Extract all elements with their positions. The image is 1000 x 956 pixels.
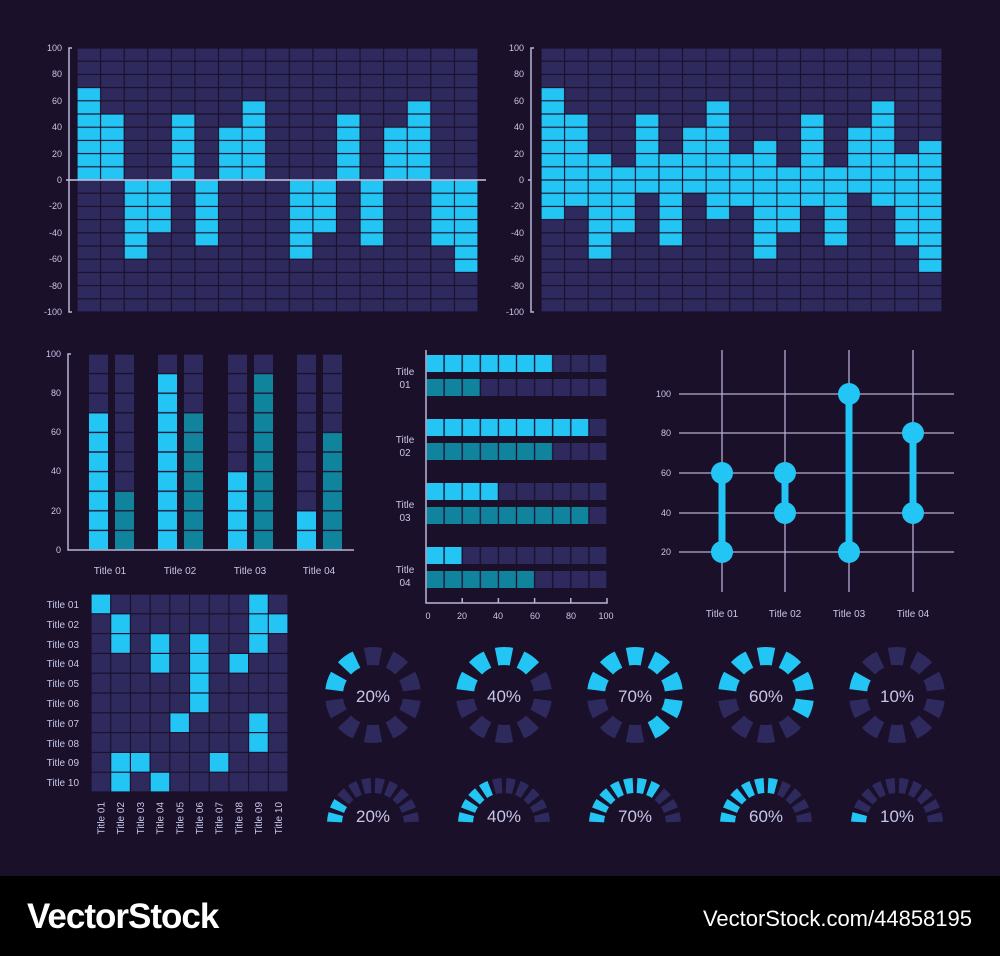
donut: 20%: 20% [356, 687, 390, 706]
chart: grouped vertical bars [46, 349, 354, 577]
row labels: Title 01 [47, 600, 79, 611]
gauge: 40% [458, 778, 550, 826]
y-axis labels: 40 [52, 122, 62, 132]
chart: dumbbell range chart: 80 [661, 428, 671, 438]
gauge: 10%: 10% [880, 807, 914, 826]
row labels: 03 [399, 513, 411, 524]
gauge: 10% [851, 778, 943, 826]
y-axis labels: -60 [511, 254, 524, 264]
row labels: Title 03 [47, 640, 79, 651]
chart: grouped horizontal bars [396, 350, 614, 621]
y-axis labels: -20 [49, 201, 62, 211]
y-axis labels: 100 [47, 43, 62, 53]
donut: 10%: 10% [880, 687, 914, 706]
chart: dumbbell range chart: 60 [661, 468, 671, 478]
x labels: Title 01 [94, 566, 127, 577]
chart: grouped vertical bars: 0 [56, 545, 61, 555]
row labels: Title 06 [47, 699, 79, 710]
chart: dumbbell range chart: Title 03 [833, 609, 866, 620]
column labels [96, 802, 285, 834]
chart: grouped vertical bars: 20 [51, 506, 61, 516]
chart: grouped horizontal bars: 40 [493, 611, 503, 621]
y-axis labels: -40 [49, 228, 62, 238]
y-axis labels: -20 [511, 201, 524, 211]
y-axis labels: 0 [57, 175, 62, 185]
y-axis labels: -80 [49, 281, 62, 291]
row labels: Title 10 [47, 778, 79, 789]
y-axis labels: -40 [511, 228, 524, 238]
chart: dumbbell range chart: 40 [661, 508, 671, 518]
donut: 10% [849, 647, 945, 743]
chart: grouped vertical bars: 60 [51, 427, 61, 437]
row labels [396, 367, 415, 589]
row labels: Title 05 [47, 679, 79, 690]
column labels: Title 03 [136, 802, 147, 834]
x labels: Title 03 [234, 566, 267, 577]
row labels: Title [396, 565, 415, 576]
gauge: 20%: 20% [356, 807, 390, 826]
row labels: Title [396, 367, 415, 378]
y-axis labels: 20 [52, 149, 62, 159]
footer: watermark bar [0, 876, 1000, 956]
row labels: Title 08 [47, 739, 79, 750]
chart: grouped horizontal bars: 60 [530, 611, 540, 621]
chart: grouped vertical bars: 100 [46, 349, 61, 359]
bars: cyan values [77, 88, 478, 272]
x labels: Title 02 [164, 566, 197, 577]
row labels: Title 02 [47, 620, 79, 631]
y-axis labels: 80 [514, 69, 524, 79]
image id text: VectorStock.com/44858195 [703, 906, 972, 931]
y-axis labels: 20 [514, 149, 524, 159]
column labels: Title 07 [215, 802, 226, 834]
donut: 20% [325, 647, 421, 743]
row labels: Title [396, 435, 415, 446]
chart: top-right range column chart [506, 43, 942, 317]
row labels: Title [396, 500, 415, 511]
row labels: Title 09 [47, 758, 79, 769]
y-axis labels: 40 [514, 122, 524, 132]
brand text: VectorStock [27, 897, 220, 936]
chart: grouped vertical bars: 80 [51, 388, 61, 398]
y-axis labels: 80 [52, 69, 62, 79]
donut: 60%: 60% [749, 687, 783, 706]
donut: 40%: 40% [487, 687, 521, 706]
column labels: Title 09 [254, 802, 265, 834]
row labels: 02 [399, 448, 411, 459]
x labels: Title 04 [303, 566, 336, 577]
gauge: 20% [327, 778, 419, 826]
chart: dumbbell range chart: 20 [661, 547, 671, 557]
chart: grouped horizontal bars: 80 [566, 611, 576, 621]
chart: dumbbell range chart: Title 04 [897, 609, 930, 620]
chart: top-left positive/negative column chart [44, 43, 486, 317]
gauge: 60% [720, 778, 812, 826]
chart: dumbbell range chart: Title 02 [769, 609, 802, 620]
bars: cyan ranges [541, 88, 942, 272]
row labels: 04 [399, 578, 411, 589]
gauge: 40%: 40% [487, 807, 521, 826]
x labels [94, 566, 336, 577]
y-axis labels: 60 [52, 96, 62, 106]
donut: 70%: 70% [618, 687, 652, 706]
chart: dumbbell range chart: Title 01 [706, 609, 739, 620]
column labels: Title 08 [234, 802, 245, 834]
donut: 40% [456, 647, 552, 743]
y-axis labels: 0 [519, 175, 524, 185]
chart: heatmap matrix [47, 594, 288, 834]
y-axis labels: -100 [506, 307, 524, 317]
column labels: Title 04 [156, 802, 167, 834]
chart: grouped horizontal bars: 100 [598, 611, 614, 621]
row labels: Title 04 [47, 659, 79, 670]
y-axis labels: -100 [44, 307, 62, 317]
donut: 60% [718, 647, 814, 743]
column labels: Title 10 [274, 802, 285, 834]
row labels: 01 [399, 380, 411, 391]
chart: grouped vertical bars: 40 [51, 466, 61, 476]
column labels: Title 06 [195, 802, 206, 834]
donut: 70% [587, 647, 683, 743]
y-axis labels: 100 [509, 43, 524, 53]
chart: dumbbell range chart [656, 350, 954, 620]
chart: dumbbell range chart: 100 [656, 389, 671, 399]
gauge: 70% [589, 778, 681, 826]
gauge: 70%: 70% [618, 807, 652, 826]
y-axis labels: -60 [49, 254, 62, 264]
y-axis labels: -80 [511, 281, 524, 291]
column labels: Title 02 [116, 802, 127, 834]
y-axis labels: 60 [514, 96, 524, 106]
row labels [47, 600, 79, 789]
gauge: 60%: 60% [749, 807, 783, 826]
chart: grouped horizontal bars: 0 [425, 611, 431, 621]
row labels: Title 07 [47, 719, 79, 730]
column labels: Title 05 [175, 802, 186, 834]
y-axis labels [506, 43, 524, 317]
column labels: Title 01 [96, 802, 108, 834]
chart: grouped horizontal bars: 20 [457, 611, 467, 621]
y-axis labels [44, 43, 62, 317]
